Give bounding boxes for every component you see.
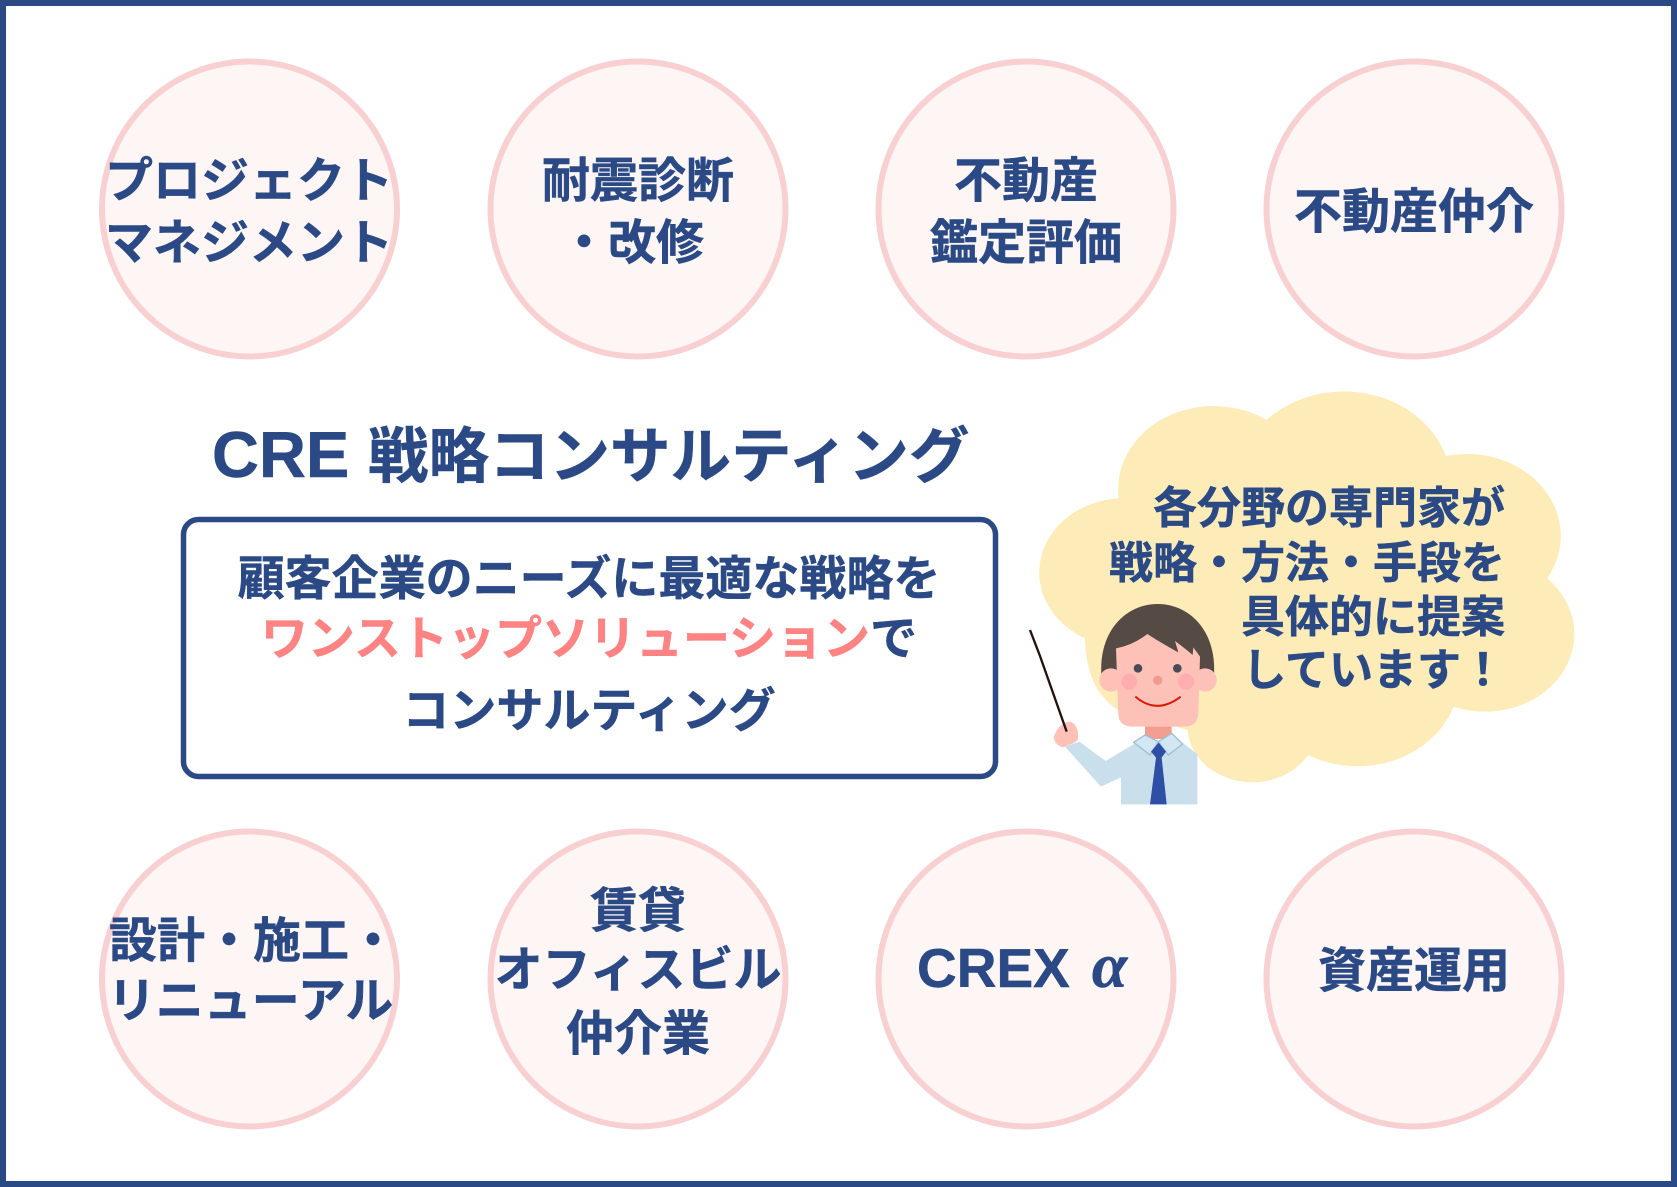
- circle: asset management: [1266, 832, 1562, 1126]
- circle: project management: プロジェクト: [105, 155, 393, 208]
- speech cloud: 各分野の専門家が: [1153, 484, 1505, 533]
- circle: project management: [102, 62, 397, 356]
- speech cloud: 戦略・方法・手段を: [1109, 539, 1505, 588]
- speech cloud: 具体的に提案: [1241, 593, 1505, 642]
- circle: design, construction, renewal: [102, 832, 397, 1126]
- callout box: one-stop solution: 顧客企業のニーズに最適な戦略を: [238, 552, 940, 605]
- circle: seismic diagnosis and retrofit: ・改修: [560, 217, 704, 270]
- circle: office building leasing brokerage: オフィスビル: [494, 944, 782, 997]
- circle: real estate appraisal: 鑑定評価: [930, 217, 1122, 270]
- circle: seismic diagnosis and retrofit: [490, 62, 786, 356]
- circle: design, construction, renewal: 設計・施工・: [109, 915, 397, 968]
- circle: office building leasing brokerage: [490, 832, 786, 1126]
- circle: CREX alpha: CREX α: [917, 930, 1129, 1001]
- title: CRE 戦略コンサルティング: [212, 418, 969, 491]
- callout box: one-stop solution: ワンストップソリューションで: [261, 612, 917, 665]
- circle: office building leasing brokerage: 賃貸: [590, 885, 686, 938]
- speech cloud: [1039, 391, 1574, 782]
- circle: project management: マネジメント: [105, 217, 393, 270]
- circle: asset management: 資産運用: [1318, 945, 1510, 998]
- callout box: one-stop solution: コンサルティング: [402, 684, 776, 737]
- circle: seismic diagnosis and retrofit: 耐震診断: [542, 155, 734, 208]
- circle: design, construction, renewal: リニューアル: [108, 975, 393, 1028]
- circle: office building leasing brokerage: 仲介業: [566, 1008, 710, 1061]
- circle: real estate appraisal: [878, 62, 1174, 356]
- circle: real estate brokerage: [1266, 62, 1562, 356]
- circle: real estate brokerage: 不動産仲介: [1294, 186, 1534, 239]
- callout box: one-stop solution: [184, 520, 996, 776]
- circle: real estate appraisal: 不動産: [954, 155, 1098, 208]
- circle: CREX alpha: [878, 832, 1174, 1126]
- speech cloud: しています！: [1242, 646, 1505, 695]
- icon: man with pointer: [1030, 604, 1217, 804]
